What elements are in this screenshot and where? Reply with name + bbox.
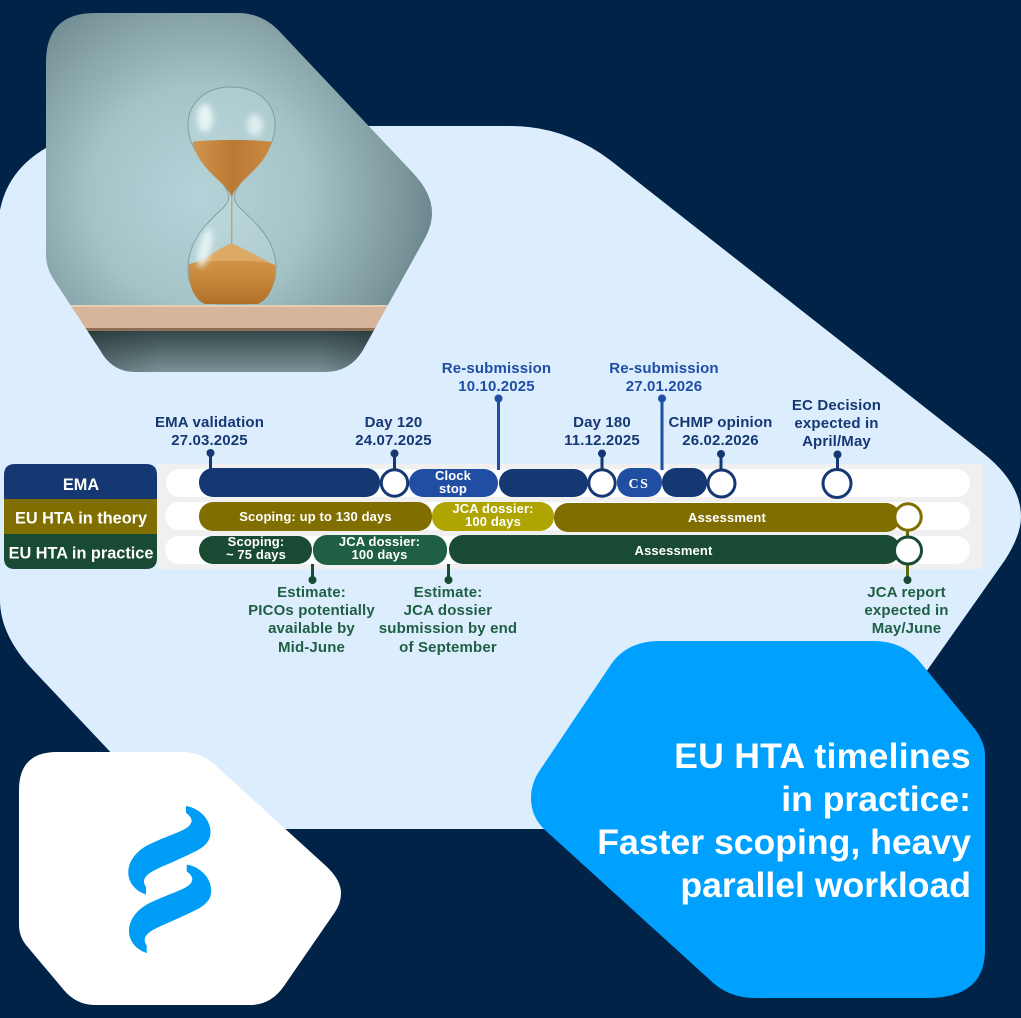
white row tracks bbox=[165, 469, 970, 564]
bottom milestone labels: Estimate: bbox=[277, 584, 346, 601]
EU HTA in theory bars: JCA dossier: bbox=[452, 501, 534, 516]
EU HTA in practice bars: 100 days bbox=[352, 547, 407, 562]
EU HTA in theory bars bbox=[199, 501, 900, 532]
title text: in practice: bbox=[781, 779, 971, 819]
bottom milestone labels: submission by end bbox=[379, 620, 517, 637]
light blue backdrop panel bbox=[0, 126, 1021, 829]
logo panel bbox=[19, 752, 341, 1005]
EU HTA in theory bars: 100 days bbox=[465, 514, 521, 529]
top milestone labels: April/May bbox=[802, 433, 871, 450]
bottom milestone labels: available by bbox=[268, 620, 355, 637]
bottom milestone labels: PICOs potentially bbox=[248, 602, 375, 619]
title text: Faster scoping, heavy bbox=[597, 822, 971, 862]
EU HTA in practice bars: Scoping: bbox=[228, 534, 284, 549]
EU HTA in practice bars: JCA dossier: bbox=[339, 534, 420, 549]
bottom milestone labels bbox=[248, 584, 949, 656]
photo: hourglass on shelf bbox=[40, 8, 440, 373]
re-submission labels: Re-submission bbox=[442, 360, 551, 377]
title text: parallel workload bbox=[680, 865, 971, 905]
milestone circles bbox=[381, 470, 922, 564]
bottom milestone labels: JCA report bbox=[867, 584, 946, 601]
re-submission labels: Re-submission bbox=[609, 360, 719, 377]
title panel bbox=[531, 641, 985, 998]
icon: double helix bbox=[128, 806, 211, 953]
top milestone labels: 27.03.2025 bbox=[171, 432, 248, 449]
timeline background band bbox=[157, 464, 983, 569]
row labels: EMA bbox=[63, 476, 99, 494]
bottom milestone labels: Mid-June bbox=[278, 639, 345, 656]
EU HTA in practice bars: ~ 75 days bbox=[226, 547, 286, 562]
EU HTA in practice bars: Assessment bbox=[635, 543, 713, 558]
top milestone labels: expected in bbox=[794, 415, 879, 432]
row labels: EU HTA in practice bbox=[9, 544, 153, 562]
bottom milestone labels: Estimate: bbox=[414, 584, 482, 601]
EU HTA in theory bars: Scoping: up to 130 days bbox=[239, 509, 392, 524]
top milestone labels: EC Decision bbox=[792, 397, 881, 414]
re-submission labels: 27.01.2026 bbox=[626, 378, 702, 395]
EMA row bars bbox=[199, 468, 707, 497]
top milestone labels: EMA validation bbox=[155, 414, 264, 431]
timeline chart bbox=[4, 360, 983, 656]
bottom milestone labels: May/June bbox=[872, 620, 941, 637]
EMA row bars: Clock bbox=[435, 468, 472, 483]
hourglass bbox=[188, 87, 276, 304]
top milestone labels: 11.12.2025 bbox=[564, 432, 640, 449]
EU HTA in theory bars: Assessment bbox=[688, 510, 766, 525]
re-submission labels: 10.10.2025 bbox=[458, 378, 535, 395]
row labels bbox=[4, 464, 157, 569]
top milestone labels: CHMP opinion bbox=[668, 414, 773, 431]
top milestone labels bbox=[155, 397, 881, 450]
EU HTA in practice bars bbox=[199, 534, 900, 565]
row labels: EU HTA in theory bbox=[15, 509, 147, 527]
top milestone labels: 26.02.2026 bbox=[682, 432, 759, 449]
EMA row bars: CS bbox=[629, 477, 649, 492]
EMA row bars: stop bbox=[439, 481, 467, 496]
top milestone labels: Day 120 bbox=[365, 414, 422, 431]
title text bbox=[597, 736, 971, 905]
bottom milestone labels: of September bbox=[399, 639, 497, 656]
top milestone labels: Day 180 bbox=[573, 414, 631, 431]
title text: EU HTA timelines bbox=[674, 736, 971, 776]
milestone stems and dots bbox=[208, 396, 910, 582]
bottom milestone labels: expected in bbox=[864, 602, 949, 619]
bottom milestone labels: JCA dossier bbox=[404, 602, 492, 619]
re-submission labels bbox=[442, 360, 719, 395]
shelf bbox=[70, 305, 388, 372]
top milestone labels: 24.07.2025 bbox=[355, 432, 432, 449]
